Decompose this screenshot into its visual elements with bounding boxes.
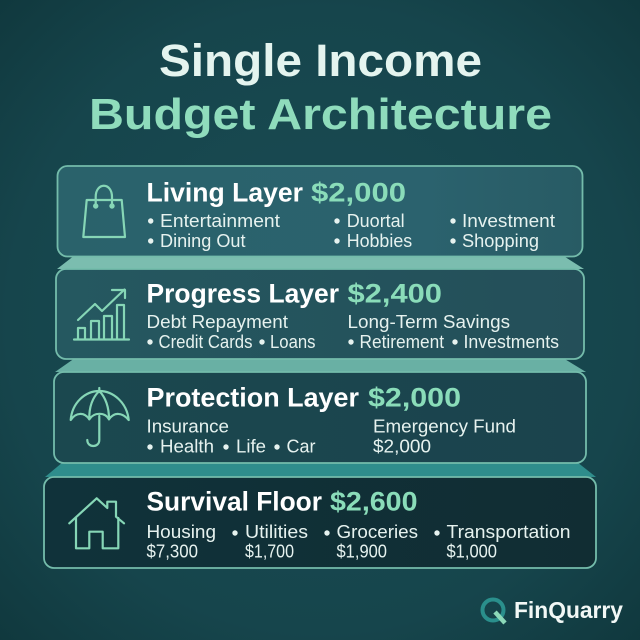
survival amount: $2,600: [330, 486, 418, 516]
long-term savings group: Investments: [464, 332, 559, 352]
title line two: Budget Architecture: [89, 90, 552, 139]
progress amount: $2,400: [348, 278, 442, 308]
transportation cost: $1,000: [446, 542, 497, 562]
living items: Entertainment: [160, 211, 280, 231]
icon: umbrella: [71, 388, 129, 446]
connector: living to progress: [57, 255, 584, 269]
icon: house: [69, 498, 124, 548]
icon: shopping bag: [83, 186, 125, 237]
debt repayment group: [146, 312, 316, 352]
housing cost: [146, 522, 216, 562]
panel: survival floor: [44, 477, 596, 568]
groceries cost: $1,900: [336, 542, 387, 562]
survival panel background: [44, 477, 596, 568]
living panel background: [58, 166, 582, 256]
title: [89, 35, 552, 139]
transportation cost: Transportation: [446, 522, 570, 542]
utilities cost: $1,700: [245, 542, 294, 562]
emergency fund group: [373, 416, 516, 456]
living items: [148, 211, 555, 251]
protection amount: $2,000: [368, 382, 461, 412]
protection panel background: [54, 372, 586, 463]
living items: Shopping: [462, 231, 539, 251]
debt repayment group: Loans: [270, 332, 316, 352]
living heading: Living Layer: [146, 178, 303, 208]
utilities cost: Utilities: [245, 522, 308, 542]
progress heading: Progress Layer: [146, 278, 339, 308]
icon: growth chart: [74, 290, 129, 340]
insurance group: Insurance: [146, 416, 229, 436]
panel: living layer: [58, 166, 582, 256]
insurance group: Health: [160, 436, 214, 456]
emergency fund group: Emergency Fund: [373, 416, 516, 436]
logo wordmark: FinQuarry: [514, 597, 623, 623]
long-term savings group: [348, 312, 559, 352]
long-term savings group: Long-Term Savings: [348, 312, 510, 332]
survival heading: Survival Floor: [146, 486, 322, 516]
living amount: $2,000: [311, 178, 406, 208]
living items: Investment: [462, 211, 555, 231]
transportation cost: [434, 522, 570, 562]
housing cost: $7,300: [146, 542, 198, 562]
logo: FinQuarry: [482, 597, 623, 623]
utilities cost: [232, 522, 308, 562]
long-term savings group: Retirement: [360, 332, 444, 352]
panel: protection layer: [54, 372, 586, 463]
living items: Hobbies: [347, 231, 412, 251]
insurance group: Car: [286, 436, 316, 456]
debt repayment group: Credit Cards: [158, 332, 252, 352]
icon: magnifier Q: [482, 600, 505, 623]
living items: Duortal: [347, 211, 405, 231]
groceries cost: [324, 522, 418, 562]
protection heading: Protection Layer: [146, 382, 359, 412]
connector: protection to survival: [45, 462, 596, 477]
debt repayment group: Debt Repayment: [146, 312, 288, 332]
groceries cost: Groceries: [336, 522, 418, 542]
housing cost: Housing: [146, 522, 216, 542]
insurance group: [146, 416, 316, 456]
living items: Dining Out: [160, 231, 246, 251]
panel: progress layer: [56, 269, 584, 359]
insurance group: Life: [236, 436, 266, 456]
title line one: Single Income: [159, 35, 482, 86]
connector: progress to protection: [55, 358, 586, 372]
emergency fund group: $2,000: [373, 436, 431, 456]
progress panel background: [56, 269, 584, 359]
